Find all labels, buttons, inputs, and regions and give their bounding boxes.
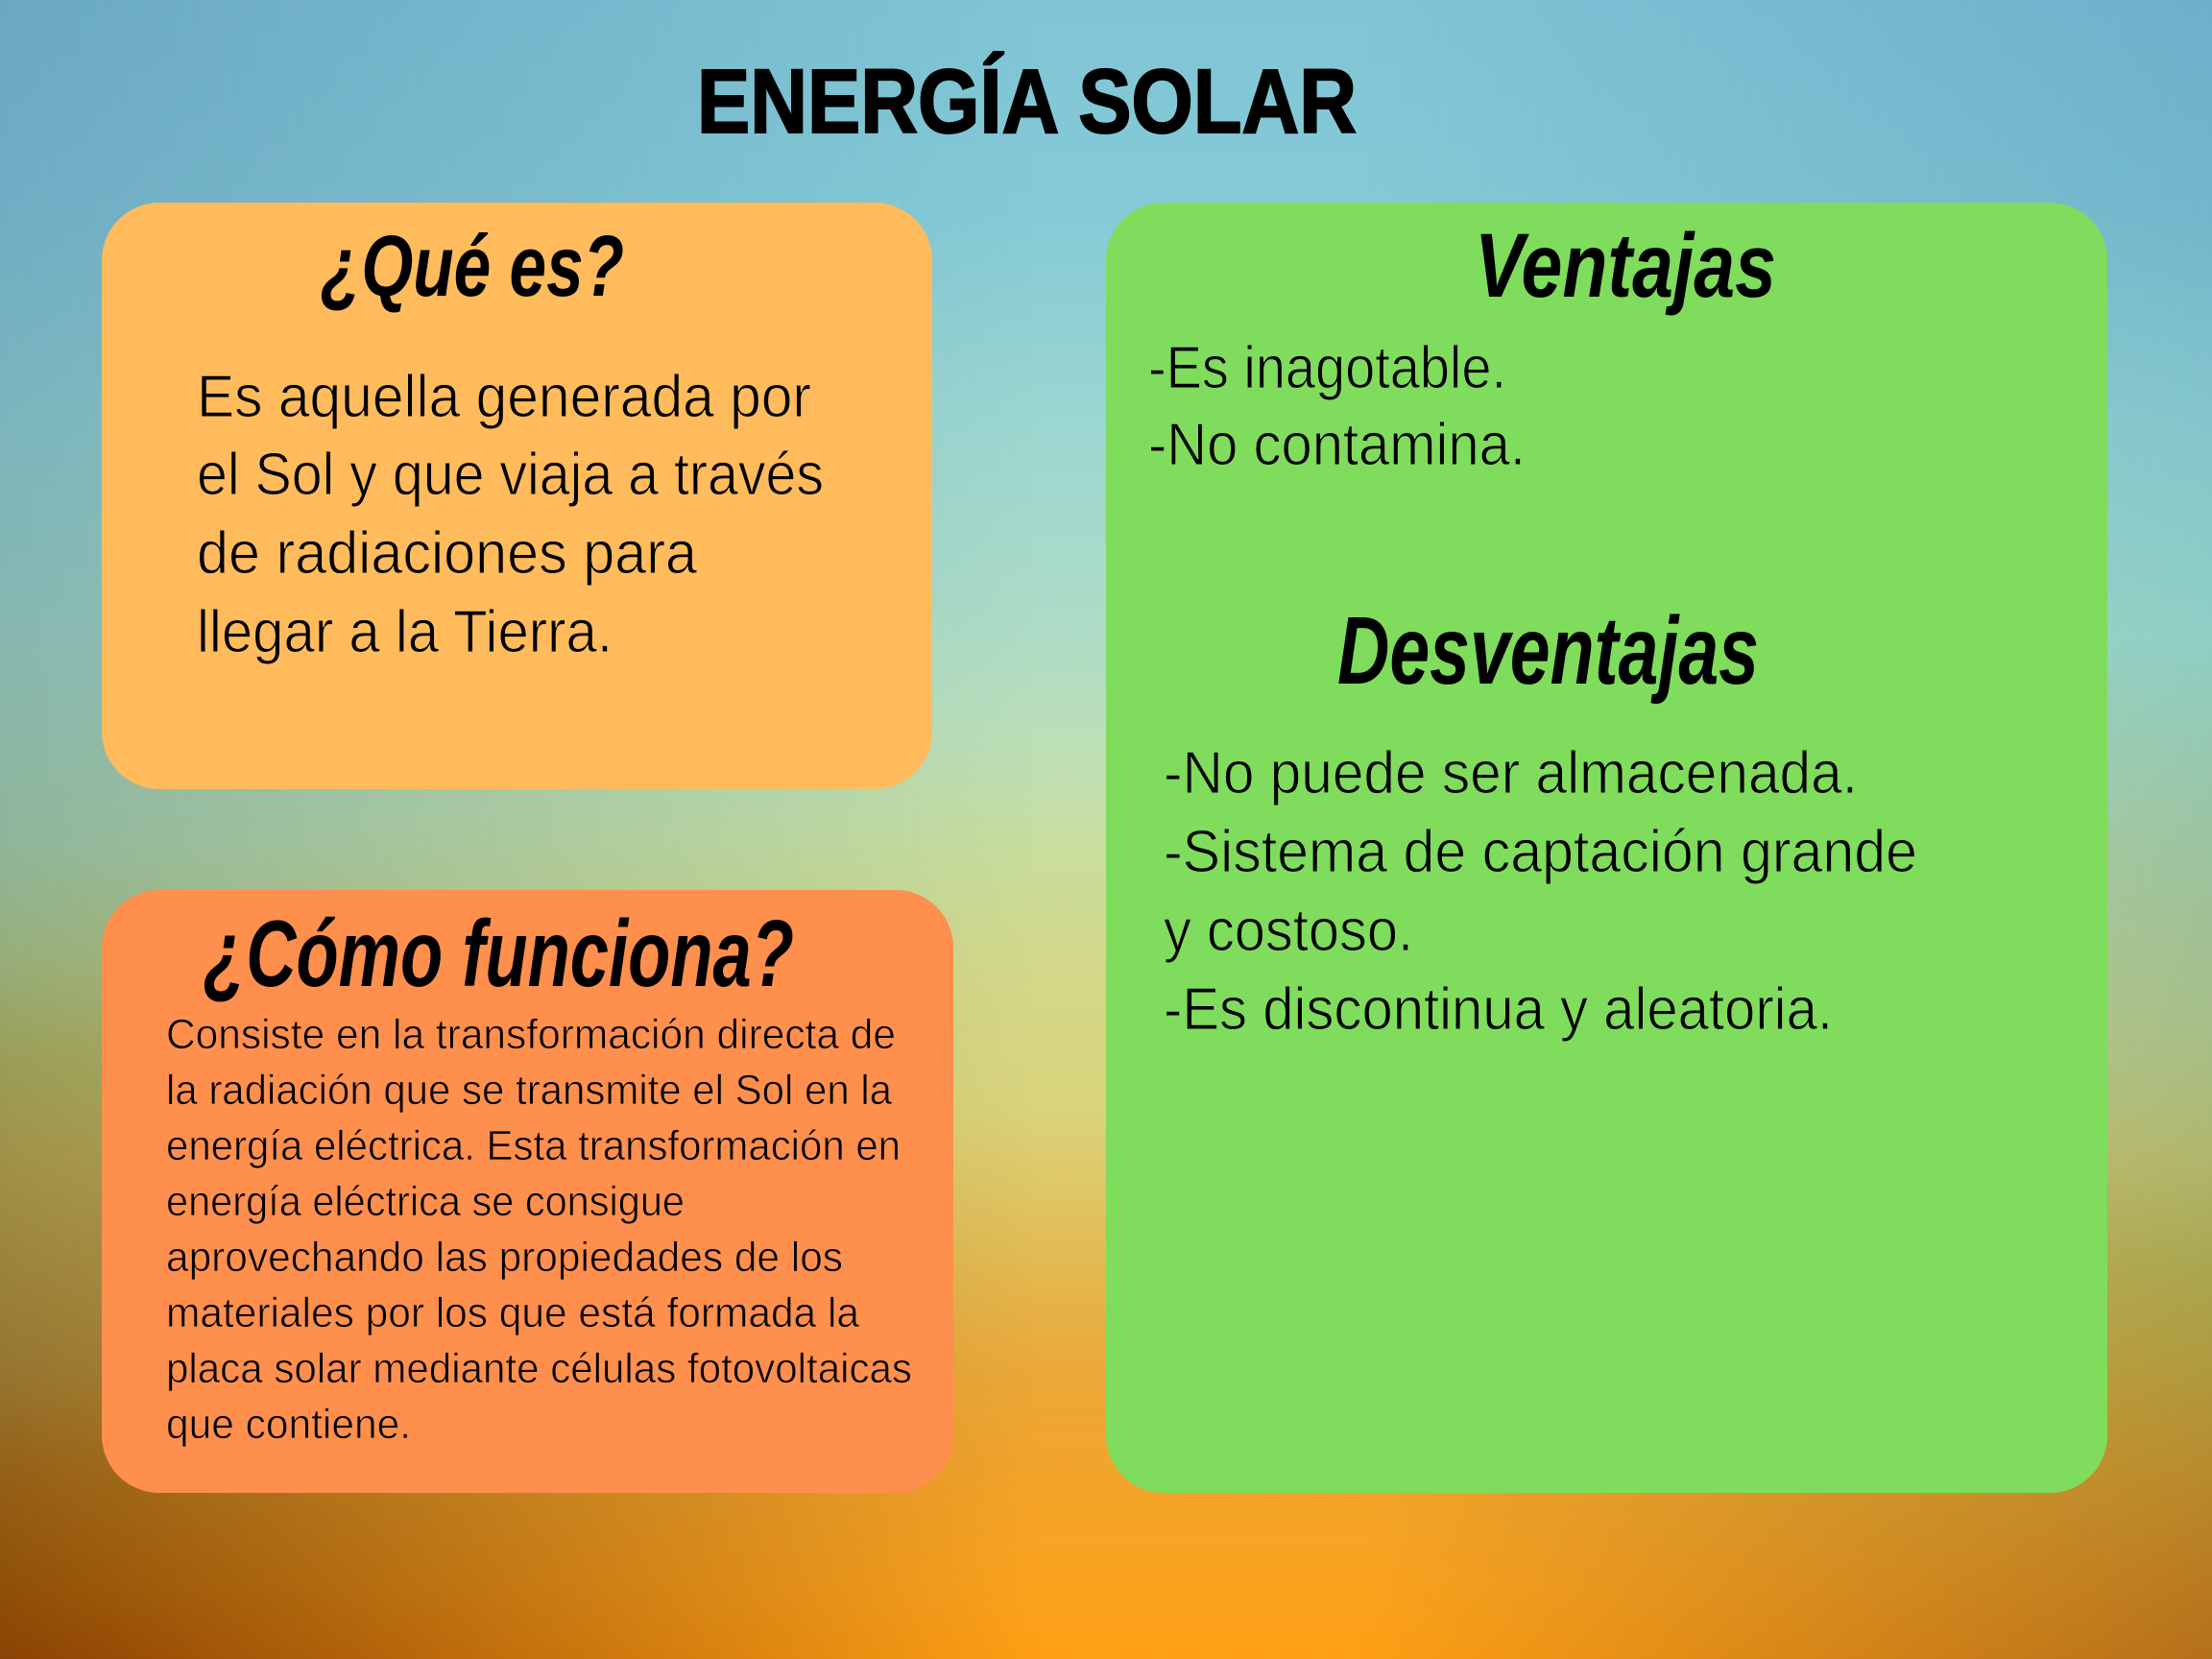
text block: explanation: materiales por los que está formada la [166,1289,860,1336]
panel background [102,890,953,1493]
heading: desventajas: Desventajas [1337,597,1759,705]
text block: definition: el Sol y que viaja a través [197,442,824,508]
text block: explanation: placa solar mediante células fotovoltaicas [166,1345,912,1392]
text block: desventajas list [1164,740,1917,1043]
panel: qué es [102,203,932,789]
text block: ventajas list: -Es inagotable. [1148,335,1506,401]
heading: ventajas: Ventajas [1475,215,1776,317]
heading: cómo funciona: ¿Cómo funciona? [204,901,794,1006]
text block: explanation: que contiene. [166,1401,411,1448]
text block: explanation [166,1011,912,1448]
text block: definition [197,364,824,665]
text block: explanation: aprovechando las propiedades de los [166,1234,843,1281]
panel: cómo funciona [102,890,953,1493]
text block: desventajas list: -Sistema de captación grande [1164,819,1917,885]
heading: qué es: ¿Qué es? [321,219,624,315]
panel background [102,203,932,789]
text block: explanation: la radiación que se transmite el Sol en la [166,1067,893,1114]
text block: desventajas list: y costoso. [1164,898,1413,964]
text block: explanation: energía eléctrica se consigue [166,1178,685,1225]
text block: definition: de radiaciones para [197,520,697,587]
text block: desventajas list: -Es discontinua y aleatoria. [1164,976,1833,1043]
text block: explanation: Consiste en la transformación directa de [166,1011,896,1058]
text block: definition: Es aquella generada por [197,364,811,430]
panel background [1106,203,2107,1493]
text block: desventajas list: -No puede ser almacenada. [1164,740,1858,806]
text block: explanation: energía eléctrica. Esta transformación en [166,1122,901,1169]
text block: definition: llegar a la Tierra. [197,599,613,665]
panel: ventajas y desventajas [1106,203,2107,1493]
title: ENERGÍA SOLAR [697,51,1357,153]
text block: ventajas list [1148,335,1526,478]
text block: ventajas list: -No contamina. [1148,412,1526,478]
